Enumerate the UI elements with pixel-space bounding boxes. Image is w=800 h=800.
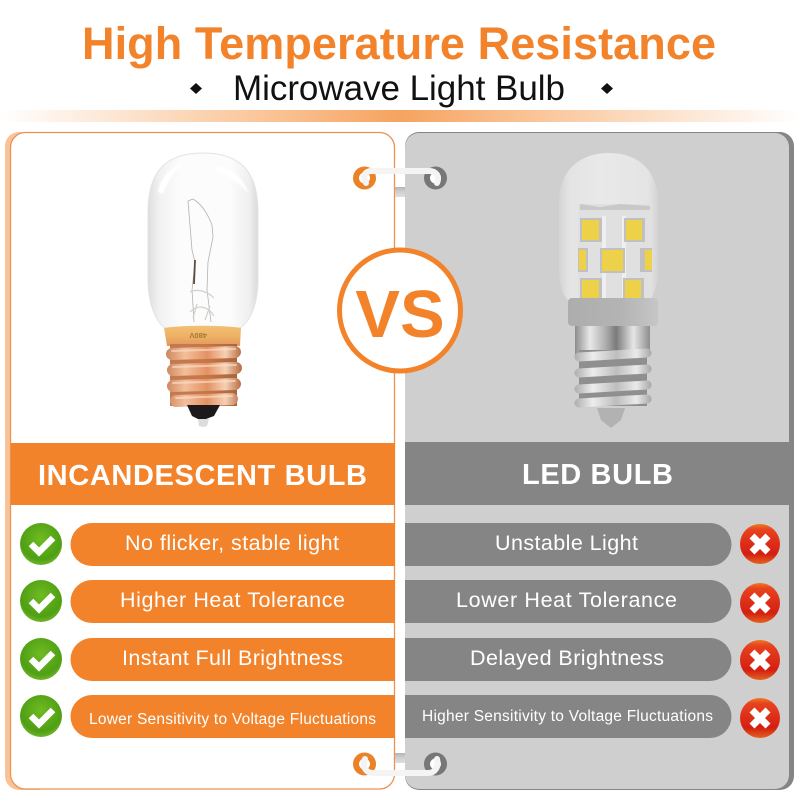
- incandescent bulb photo: [148, 153, 258, 427]
- row: higher sensitivity: [405, 695, 780, 738]
- icon: green check: [20, 638, 62, 680]
- heading band: LED bulb: [405, 442, 789, 505]
- icon: green check: [20, 695, 62, 737]
- panel: incandescent bulb: [5, 132, 395, 790]
- VS badge: VS: [355, 277, 445, 352]
- LED bulb photo: [559, 153, 658, 428]
- heading band: LED bulb: LED BULB: [522, 459, 673, 491]
- panel: LED bulb: [405, 132, 794, 790]
- row: lower heat tolerance: Lower Heat Tolerance: [456, 588, 677, 612]
- title: High Temperature Resistance: [82, 18, 716, 69]
- icon: red cross: [740, 640, 780, 680]
- row: no flicker: No flicker, stable light: [125, 531, 339, 555]
- icon: green check: [20, 523, 62, 565]
- row: unstable light: [405, 523, 780, 566]
- row: lower sensitivity: Lower Sensitivity to Voltage Fluctuations: [89, 711, 376, 728]
- row: unstable light: Unstable Light: [495, 531, 638, 555]
- row: higher heat tolerance: Higher Heat Tolerance: [120, 588, 345, 612]
- subtitle with diamonds: Microwave Light Bulb: [233, 69, 565, 108]
- VS badge: [340, 250, 460, 371]
- icon: red cross: [740, 524, 780, 564]
- row: higher heat tolerance: [20, 580, 395, 623]
- icon: red cross: [740, 583, 780, 623]
- row: lower heat tolerance: [405, 580, 780, 623]
- row: delayed brightness: Delayed Brightness: [470, 646, 664, 670]
- row: instant full brightness: Instant Full Brightness: [122, 646, 343, 670]
- top binder clip: [356, 170, 444, 197]
- row: instant full brightness: [20, 638, 395, 681]
- icon: red cross: [740, 698, 780, 738]
- heading band: incandescent bulb: [11, 443, 395, 505]
- row: delayed brightness: [405, 638, 780, 681]
- row: higher sensitivity: Higher Sensitivity to Voltage Fluctuations: [422, 708, 713, 725]
- icon: green check: [20, 580, 62, 622]
- bottom binder clip: [356, 753, 444, 780]
- lamp base marking: 480V: [189, 331, 207, 340]
- heading band: incandescent bulb: INCANDESCENT BULB: [38, 460, 367, 492]
- row: no flicker: [20, 523, 395, 566]
- row: lower sensitivity: [20, 695, 395, 738]
- gradient divider strip: [0, 110, 800, 122]
